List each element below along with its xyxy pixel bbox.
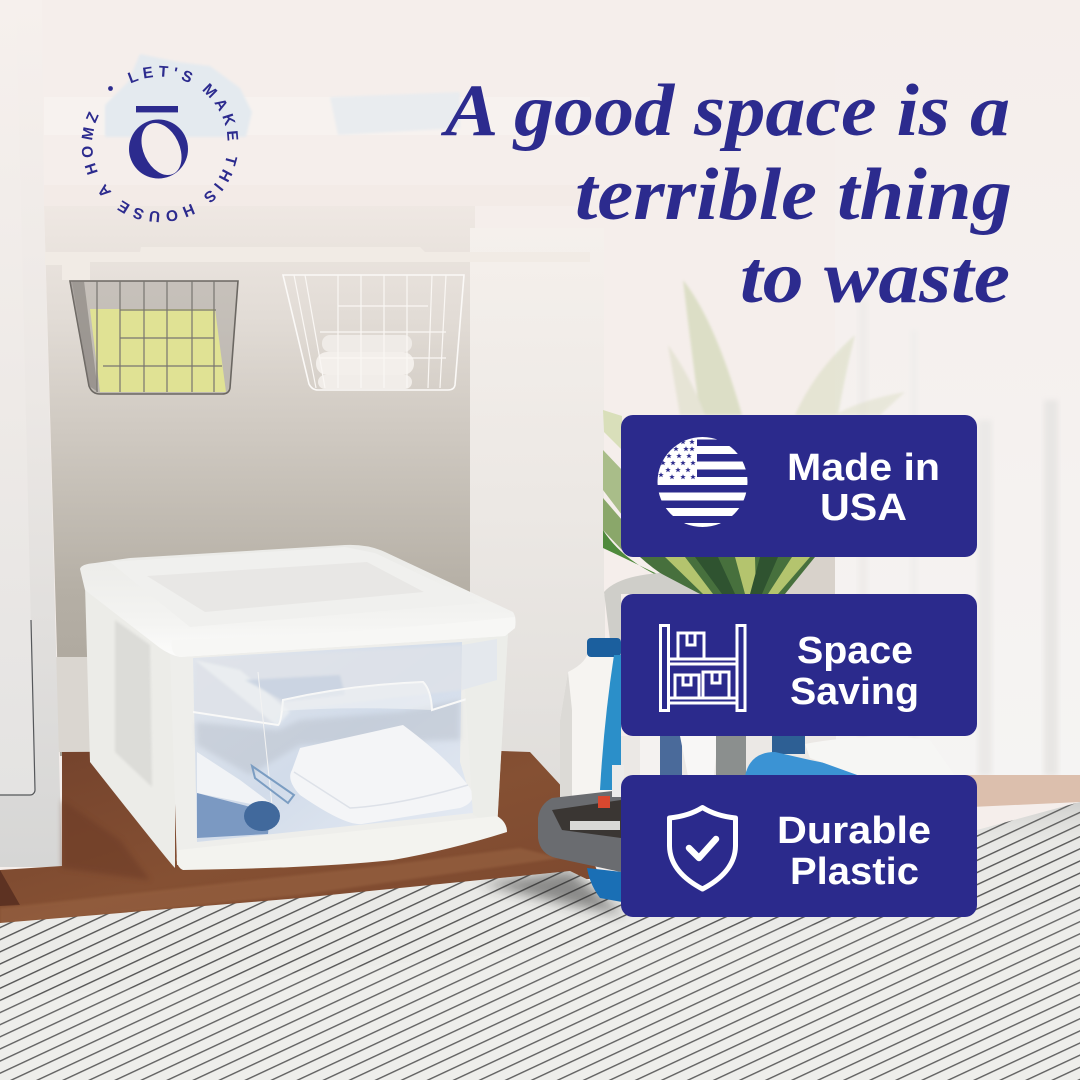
dense central leaves	[640, 557, 815, 594]
hanging rail	[45, 247, 590, 280]
icon: storage shelf	[660, 626, 745, 710]
shelf item	[330, 92, 460, 135]
badge text: Made in	[787, 447, 940, 489]
badge: Made in USA	[621, 415, 977, 557]
lid front lip	[172, 617, 515, 657]
spray bottle	[560, 638, 621, 800]
pale background leaves	[668, 280, 905, 415]
bottom rail	[177, 816, 507, 870]
badge text: Durable	[777, 810, 931, 852]
right pillar	[470, 228, 605, 785]
badge: Durable Plastic: Plastic	[790, 851, 919, 893]
logo ring text: LET'S MAKE THIS HOUSE A HOMZ	[82, 66, 238, 222]
pale paper	[197, 752, 280, 810]
side window	[115, 620, 152, 787]
wire baskets	[45, 247, 590, 394]
plant	[603, 280, 905, 594]
upper translucent band	[195, 645, 462, 726]
right wall section	[604, 206, 836, 595]
folded towel	[290, 725, 472, 824]
floor items between badges	[640, 736, 955, 776]
headline: terrible thing	[575, 154, 1012, 236]
drawer front body	[170, 630, 508, 865]
headline: A good space is a	[441, 70, 1010, 152]
badge: Durable Plastic	[621, 775, 977, 917]
blue clip	[252, 766, 294, 803]
handle string	[258, 672, 272, 805]
baseboard	[56, 657, 96, 752]
icon: shield with check	[670, 808, 736, 889]
yellow basket	[70, 281, 238, 394]
plant pot	[604, 573, 700, 640]
left cabinet	[0, 0, 62, 867]
headline: to waste	[740, 237, 1010, 319]
logo letter o	[129, 116, 189, 182]
badge text: Space	[797, 630, 913, 672]
headline	[441, 70, 1012, 319]
white basket	[283, 275, 464, 390]
rug	[0, 802, 1080, 1080]
drawer window	[193, 642, 473, 842]
back wall niche	[44, 206, 475, 756]
storage drawer	[80, 545, 516, 870]
curtain	[835, 0, 1080, 778]
blue rolled item	[197, 793, 270, 838]
lid inner panel	[110, 547, 480, 627]
lid	[80, 545, 516, 657]
blue item below tray	[587, 868, 622, 902]
backdrop behind floor items	[621, 736, 836, 778]
tray	[538, 765, 624, 872]
right pillar of the front	[462, 633, 508, 825]
badge: Space Saving	[621, 594, 977, 736]
logo macron bar	[136, 106, 178, 112]
icon: US flag	[658, 437, 748, 527]
right floor strip	[950, 775, 1080, 808]
logo	[82, 66, 238, 222]
badge: Made in USA: USA	[820, 487, 907, 529]
clear handle	[193, 682, 495, 725]
badge: Space Saving: Saving	[790, 671, 919, 713]
leaves left of badges	[603, 410, 622, 450]
drawer side	[85, 585, 175, 868]
logo background blue object	[105, 54, 252, 137]
logo dot	[108, 86, 113, 91]
shadow inside drawer	[196, 700, 460, 775]
floor	[0, 750, 600, 930]
